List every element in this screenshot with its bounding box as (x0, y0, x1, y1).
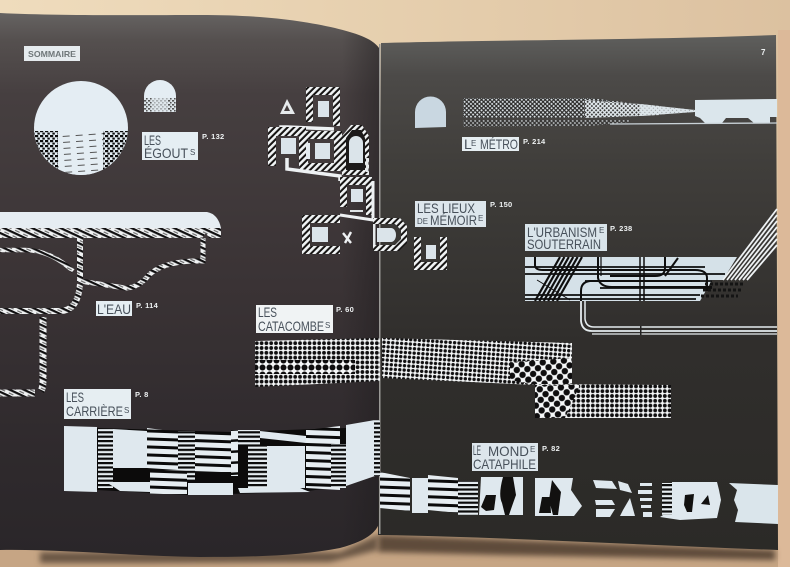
chart: water network (0, 212, 221, 393)
dot band right page (382, 338, 572, 385)
page number: p.60: P. 60 (336, 305, 354, 314)
page number: 7: 7 (761, 48, 766, 57)
icon: frame lower (340, 177, 372, 215)
label: les égouts: ÉGOUT (144, 145, 188, 161)
label: l'urbanisme souterrain: L'URBANISM (527, 224, 597, 240)
page number: p.214: P. 214 (523, 137, 546, 146)
label: les égouts (142, 132, 198, 161)
lower solid and stripes (106, 482, 150, 492)
icon: metro arch (415, 96, 446, 128)
label: le métro: E (471, 139, 476, 148)
icon: arched frame (342, 125, 369, 175)
label: le monde cataphile: CATAPHILE (473, 456, 536, 472)
label: l'urbanisme souterrain (525, 224, 607, 252)
fold stripes (374, 420, 380, 476)
pipe: right (340, 181, 373, 220)
icon: x mark (343, 232, 351, 243)
page number: p.132: P. 132 (202, 132, 225, 141)
page number: p.114: P. 114 (136, 301, 159, 310)
icon: frame open right (302, 215, 340, 254)
icon: frame left (268, 127, 306, 166)
chart: cataphile band (380, 472, 778, 524)
label: sommaire (24, 46, 80, 61)
label: l'urbanisme souterrain: E (599, 226, 604, 235)
light band (525, 257, 737, 301)
dot band lower (535, 384, 671, 418)
label: les lieux de mémoire: MÉMOIR (430, 212, 477, 228)
black backing (97, 428, 346, 495)
dot band left page (255, 338, 380, 387)
top white bar (0, 212, 221, 228)
silhouette block one (479, 477, 523, 515)
label: l'eau: L'EAU (97, 301, 131, 317)
silhouette block three (660, 482, 721, 520)
icon: small sewer arch (144, 80, 176, 112)
solid block (64, 426, 97, 492)
chart: quarries striped band (64, 420, 380, 495)
icon: frame centre (300, 131, 342, 171)
fragmented block (593, 480, 652, 517)
silhouette block two (535, 478, 582, 516)
stripes across fold (380, 472, 410, 511)
icon: frame top (306, 87, 340, 126)
label: les égouts: LES (144, 132, 161, 148)
solid block (113, 429, 147, 468)
train (695, 99, 777, 123)
right stripes (306, 426, 340, 490)
label: les catacombes: CATACOMBE (258, 318, 324, 334)
label: le monde cataphile: LE (473, 442, 481, 458)
label: le métro: L (464, 136, 472, 152)
large dot curve (510, 358, 572, 416)
page number: p.8: P. 8 (135, 390, 149, 399)
label: le métro: MÉTRO (480, 136, 518, 152)
rail (610, 123, 777, 124)
label: les catacombes: S (325, 321, 330, 330)
stripes (428, 475, 458, 513)
pipe: upper (281, 127, 334, 130)
label: le métro (462, 136, 519, 152)
wide stripes (147, 428, 178, 470)
central solid (267, 446, 305, 489)
diagonal stripe bundle right (723, 209, 777, 280)
label: les carrières (64, 389, 131, 419)
chart: urban underground lines (525, 209, 777, 335)
icon: u frame (414, 237, 447, 270)
label: les égouts: S (190, 148, 195, 157)
label: le monde cataphile: MOND (488, 443, 529, 459)
label: le monde cataphile: E (530, 445, 535, 454)
chart: metro halftone train (463, 98, 777, 127)
label: les lieux de mémoire: E (478, 214, 483, 223)
lower pipe (581, 301, 777, 334)
label: les catacombes (256, 304, 333, 334)
icon: sewer circle (34, 81, 128, 177)
icon: frame across the fold (373, 218, 407, 251)
page number: p.82: P. 82 (542, 444, 560, 453)
page number: p.150: P. 150 (490, 200, 513, 209)
solid block (412, 478, 428, 513)
stripe block (98, 429, 113, 488)
dashed rows (701, 284, 745, 296)
top solid wedge (260, 431, 306, 443)
label: les lieux de mémoire: LES LIEUX (417, 200, 476, 216)
label: les lieux de mémoire: DE (417, 217, 428, 226)
label: les carrières: LES (66, 389, 84, 405)
icon: triangle (280, 99, 295, 114)
jagged solid block (729, 483, 778, 524)
chart: catacombs dot band (255, 338, 671, 418)
page number: p.238: P. 238 (610, 224, 633, 233)
horizontal pipes (525, 257, 725, 301)
water pipes (0, 238, 203, 393)
label: les catacombes: LES (258, 304, 277, 320)
label: sommaire: SOMMAIRE (28, 49, 76, 59)
label: les lieux de mémoire (415, 200, 486, 228)
panel: left page (0, 13, 380, 557)
label: les carrières: S (124, 406, 129, 415)
textured band (0, 228, 221, 238)
label: le monde cataphile (472, 442, 538, 472)
right solid (346, 420, 375, 486)
pipe: lower (287, 158, 340, 181)
label: les carrières: CARRIÈRE (66, 403, 123, 419)
label: l'urbanisme souterrain: SOUTERRAIN (527, 236, 601, 252)
panel: right page (378, 35, 778, 550)
chart: les lieux de mémoire icons (268, 87, 447, 270)
halftone cone (463, 98, 695, 118)
diagonal stripe bundle left (535, 257, 582, 301)
